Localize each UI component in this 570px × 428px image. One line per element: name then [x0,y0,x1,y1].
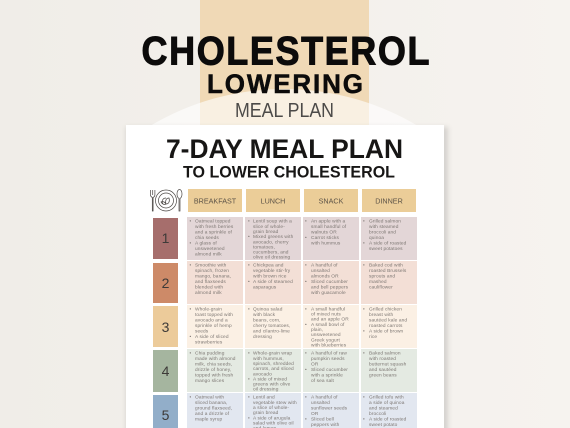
row 4: Baked salmon [369,351,401,357]
row 4: pumpkin seeds [311,356,345,362]
row 3: 3 [162,319,170,335]
row 3: • [305,323,307,328]
row 2: blended with [195,285,223,291]
row 1: sweet potatoes [369,246,403,252]
row 3: with blueberries [311,342,347,348]
row 3: beans, corn, [253,317,281,323]
row 1: Carrot sticks [311,235,339,241]
row 1: A glass of [195,241,217,247]
row 5: sunflower seeds [311,406,348,412]
row 1: • [305,220,307,225]
row 3: • [363,307,365,312]
row 1: slice of whole- [253,224,285,230]
row 3 [153,305,417,348]
row 5: A side of arugula [253,415,291,421]
row 4: milk, chia seeds, [195,362,232,368]
row 4: greens with olive [253,382,291,388]
row 4: avocado [253,371,272,377]
row 5 [153,393,417,428]
row 3: strawberries [195,339,223,345]
row 1 [153,217,417,261]
beige stripe [200,0,369,126]
row 2: mashed [369,279,387,285]
row 3: A small handful [311,306,345,312]
panel heading [166,134,403,182]
row 2: sprouts and [369,274,395,280]
row 4: 4 [162,363,170,379]
row 2: • [363,264,365,269]
row 3: • [190,335,192,340]
row 2: unsalted [311,268,330,274]
row 2: with brown rice [253,274,287,280]
row 5: • [190,396,192,401]
row 2: Sliced cucumber [311,279,348,285]
row 1: grain bread [253,229,279,235]
row 3: with black [253,312,276,318]
main title: MEAL PLAN [235,100,334,122]
panel shadow [126,127,448,428]
row 2: A handful of [311,263,338,269]
row 4: spinach, shredded [253,361,294,367]
row 5: • [248,396,250,401]
row 1: cucumbers, and [253,250,289,256]
row 3: seeds [195,328,209,334]
row 5: peppers with [311,422,340,428]
row 4: drizzle of honey, [195,367,231,373]
row 3: A side of brown [369,328,404,334]
main title [142,30,429,122]
row 1: Grilled salmon [369,219,401,225]
row 4: Chia pudding [195,351,225,357]
row 1: avocado, cherry [253,239,289,245]
row 1: unsweetened [195,246,225,252]
row 3: sautéed kale and [369,317,407,323]
row 2: roasted Brussels [369,268,407,274]
row 2: Baked cod with [369,263,403,269]
row 3: A small bowl of [311,322,345,328]
row 5: sweet potato [369,422,398,428]
row 4: mango slices [195,378,225,384]
row 3: of mixed nuts [311,312,341,318]
row 1: quinoa [369,235,384,241]
row 3: and cilantro-lime [253,328,290,334]
row 5: A side of roasted [369,417,407,423]
row 4 [153,349,417,393]
row 4: oil dressing [253,387,279,393]
row 3: Whole-grain [195,306,222,312]
row 5: ground flaxseed, [195,406,232,412]
row 4: • [190,352,192,357]
row 1: chia seeds [195,235,219,241]
row 2: and flaxseeds [195,279,226,285]
row 1: 1 [162,230,170,246]
row 5: Sliced bell [311,417,334,423]
row 2: mango, banana, [195,274,231,280]
row 1: • [363,242,365,247]
row 1: almond milk [195,252,222,258]
row 1: A side of roasted [369,241,407,247]
row 5: • [363,396,365,401]
row 1: with steamed [369,224,399,230]
main title: CHOLESTEROL [142,30,429,74]
row 2: cauliflower [369,285,393,291]
row 2: A side of steamed [253,279,293,285]
row 5: sliced banana, [195,400,227,406]
row 2: • [305,280,307,285]
row 3: Quinoa salad [253,306,283,312]
row 1: • [190,220,192,225]
row 5: maple syrup [195,417,222,423]
panel: meal plan sheet [126,125,444,428]
row 1: olive oil dressing [253,255,290,261]
row 4: topped with fresh [195,373,233,379]
row 4: • [305,368,307,373]
row 1: walnuts OR [311,230,337,236]
row 3: sprinkle of hemp [195,323,232,329]
row 2: Chickpea and [253,263,284,269]
panel heading: 7-DAY MEAL PLAN [166,134,403,164]
row 1: • [248,235,250,240]
row 2: • [190,264,192,269]
row 5: Oatmeal with [195,395,224,401]
row 3: rice [369,334,377,340]
row 5: unsalted [311,400,330,406]
row 1: broccoli and [369,230,396,236]
row 1: with hummus [311,241,341,247]
row 5: • [305,396,307,401]
row 2: 2 [162,275,170,291]
row 5: • [363,418,365,423]
row 1: with fresh berries [195,224,234,230]
row 5: • [305,418,307,423]
row 4: made with almond [195,356,236,362]
row 5: and steamed [369,406,398,412]
row 4: • [363,352,365,357]
panel heading: TO LOWER CHOLESTEROL [183,162,395,182]
row 4: with a sprinkle [311,373,343,379]
row 4: with roasted [369,356,396,362]
row 3: and an apple OR [311,317,349,323]
row 4: with hummus, [253,356,284,362]
icon: plate and cutlery [150,190,182,211]
row 3: • [305,307,307,312]
column headers [188,189,416,212]
row 5: a side of quinoa [369,400,405,406]
row 1: • [363,220,365,225]
row 5: OR [311,411,319,417]
row 1: Lentil soup with a [253,219,292,225]
row 3: • [190,307,192,312]
row 3: • [363,329,365,334]
row 4: A side of mixed [253,376,287,382]
row 3: plain, [311,327,323,333]
row 4: butternut squash [369,362,407,368]
row 3: roasted carrots [369,323,403,329]
row 5: broccoli [369,411,386,417]
column headers: LUNCH [261,196,285,205]
row 5: a slice of whole- [253,405,289,411]
row 3: • [248,307,250,312]
row 2: with guacamole [311,290,346,296]
row 3: Grilled chicken [369,306,402,312]
row 5: Grilled tofu with [369,395,404,401]
row 4: and sautéed [369,367,397,373]
row 1: and a sprinkle of [195,230,232,236]
row 1: tomatoes, [253,244,275,250]
row 2: • [248,264,250,269]
main title: LOWERING [207,68,363,99]
row 4: Whole-grain wrap [253,351,292,357]
row 4: • [248,352,250,357]
row 2: spinach, frozen [195,268,229,274]
row 5: vegetable stew with [253,400,297,406]
row 5: A handful of [311,395,338,401]
row 4: Sliced cucumber [311,367,348,373]
column headers: BREAKFAST [194,196,237,205]
column headers: DINNER [375,196,403,205]
row 1: Mixed greens with [253,234,294,240]
row 1: • [190,242,192,247]
row 1: • [305,236,307,241]
row 3: A side of sliced [195,334,229,340]
row 5: • [248,416,250,421]
row 3: cherry tomatoes, [253,323,290,329]
row 2 [153,261,417,304]
row 5: and a drizzle of [195,411,230,417]
row 2: • [248,280,250,285]
row 1: An apple with a [311,219,346,225]
row 4: of sea salt [311,378,335,384]
row 2: Smoothie with [195,263,227,269]
row 2: • [305,264,307,269]
row 1: small handful of [311,224,347,230]
row 5: grain bread [253,410,279,416]
row 4: carrots, and sliced [253,366,294,372]
row 4: OR [311,362,319,368]
row 3: avocado and a [195,317,228,323]
row 2: asparagus [253,285,277,291]
row 2: and bell peppers [311,285,349,291]
row 2: almond milk [195,290,222,296]
row 5: Lentil and [253,395,275,401]
row 5: 5 [162,407,170,423]
row 3: breast with [369,312,394,318]
row 3: Greek yogurt [311,337,340,343]
row 3: dressing [253,334,272,340]
arch [150,89,418,126]
row 4: green beans [369,373,397,379]
column headers: SNACK [319,196,344,205]
row 4: A handful of raw [311,351,347,357]
row 1: Oatmeal topped [195,219,231,225]
row 5: salad with olive oil [253,420,294,426]
row 1: • [248,220,250,225]
row 2: almonds OR [311,274,339,280]
row 3: unsweetened [311,332,341,338]
row 2: vegetable stir-fry [253,268,291,274]
row 4: • [248,377,250,382]
row 3: toast topped with [195,312,233,318]
row 4: • [305,352,307,357]
